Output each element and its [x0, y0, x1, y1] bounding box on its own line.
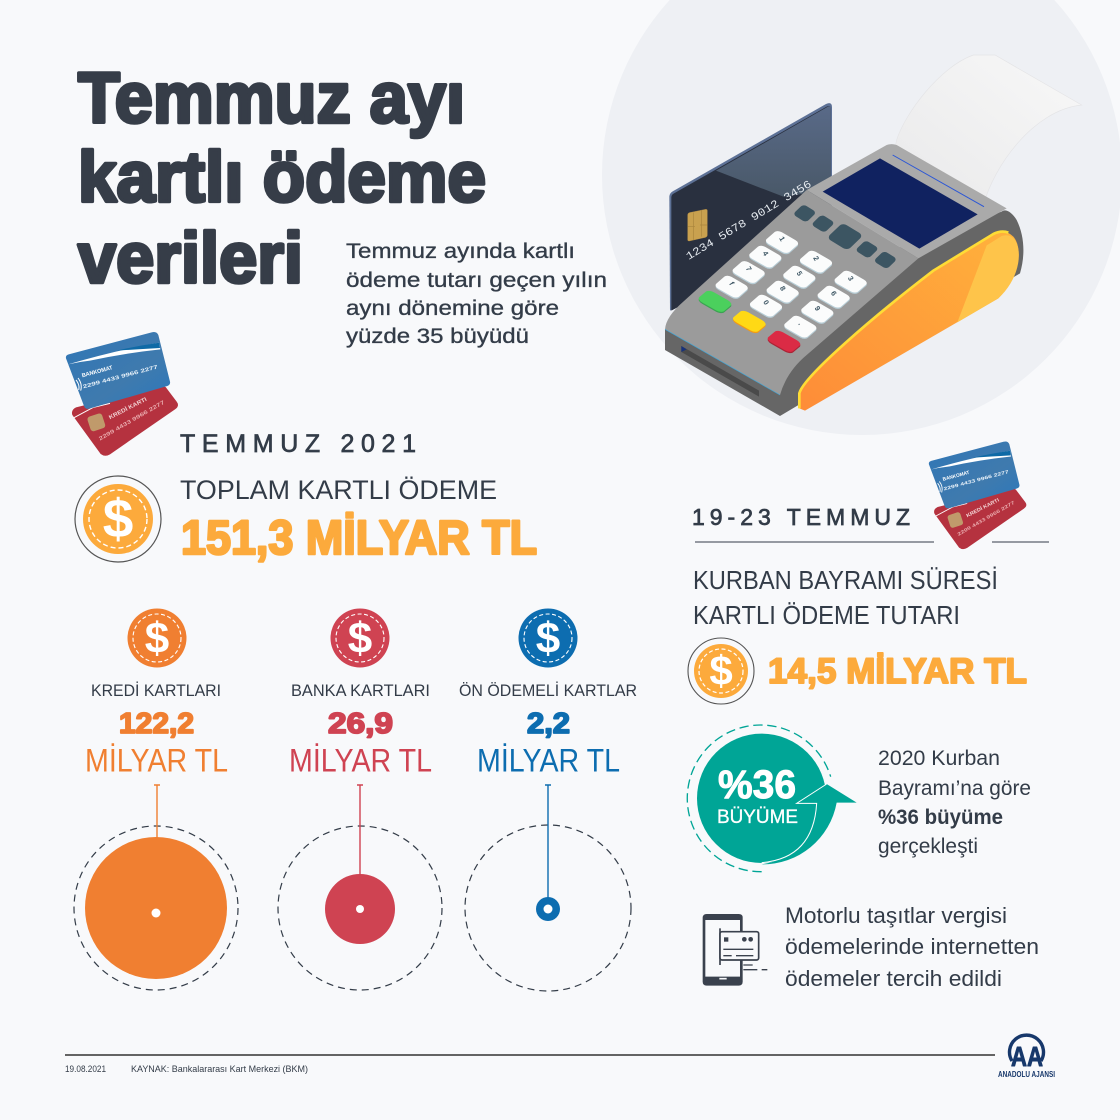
source: KAYNAK: Bankalararası Kart Merkezi (BKM)	[131, 1064, 308, 1075]
icon: coin: $	[103, 488, 133, 550]
icon: bank cards left: KREDİ KARTI	[108, 396, 148, 421]
growth description: 2020 Kurban	[878, 747, 1000, 770]
panel: bank cards	[278, 608, 442, 990]
keypad: 7	[744, 265, 754, 273]
keypad: 8	[778, 284, 788, 292]
date: 19.08.2021	[65, 1064, 106, 1075]
Kurban Bayramı heading	[693, 565, 998, 630]
icon: bank cards left: 2299 4433 9966 2277	[98, 400, 166, 442]
subtitle text: yüzde 35 büyüdü	[346, 324, 529, 348]
icon: bank cards right: 2299 4433 9966 2277	[957, 500, 1016, 537]
proportional circle	[465, 785, 631, 991]
logo: Anadolu Ajansı: AA	[1011, 1041, 1043, 1072]
keypad: 6	[829, 289, 839, 297]
icon: bank cards right: BANKOMAT	[942, 470, 970, 483]
terminal body	[665, 144, 1023, 416]
icon: coin small: $	[709, 647, 733, 694]
icon: blue coin: $	[536, 614, 560, 663]
subtitle text	[346, 239, 607, 348]
label: ÖN ÖDEMELİ KARTLAR	[459, 681, 637, 700]
total card payments: 151,3 MİLYAR TL	[181, 512, 537, 565]
subtitle text: ödeme tutarı geçen yılın	[346, 268, 607, 292]
keypad: 3	[846, 274, 856, 282]
icon: bank cards right: 2299 4433 9966 2277	[943, 469, 1010, 491]
logo: Anadolu Ajansı: ANADOLU AJANSI	[998, 1070, 1055, 1079]
icon: coin	[75, 476, 161, 562]
unit: MİLYAR TL	[85, 742, 228, 778]
credit card behind terminal	[669, 103, 832, 311]
online payment text: Motorlu taşıtlar vergisi	[785, 903, 1007, 928]
terminal screen	[823, 155, 984, 249]
label: KREDİ KARTLARI	[91, 681, 221, 700]
keypad: f	[727, 280, 737, 287]
icon: blue coin	[518, 608, 578, 668]
keypad: .	[796, 320, 805, 327]
keypad: 4	[761, 249, 771, 258]
growth description: gerçekleşti	[878, 835, 978, 858]
title	[78, 60, 486, 298]
icon: bank cards left	[66, 332, 178, 456]
unit: MİLYAR TL	[477, 742, 620, 778]
value: 2,2	[527, 708, 570, 740]
Kurban Bayramı heading: KURBAN BAYRAMI SÜRESİ	[693, 565, 998, 595]
receipt paper	[893, 55, 1082, 206]
icon: bank cards right: KREDİ KARTI	[965, 496, 1001, 519]
icon: red coin	[330, 608, 390, 668]
footer	[65, 1055, 995, 1075]
credit card behind terminal: 1234 5678 9012 3456	[685, 179, 814, 263]
online payment text: ödemelerinde internetten	[785, 934, 1039, 959]
icon: red coin: $	[348, 614, 372, 663]
orange grip	[799, 232, 1019, 411]
growth description: Bayramı’na göre	[878, 777, 1031, 800]
title: verileri	[78, 220, 303, 298]
online payment text	[785, 903, 1039, 991]
growth label: BÜYÜME	[717, 807, 798, 828]
unit: MİLYAR TL	[289, 742, 432, 778]
keypad	[714, 230, 869, 340]
total card payments: TOPLAM KARTLI ÖDEME	[180, 475, 497, 505]
growth circle and arrow	[687, 725, 857, 872]
proportional circle	[74, 785, 238, 990]
icon: bank cards left: 2299 4433 9966 2277	[82, 364, 159, 390]
function buttons	[793, 204, 897, 269]
value: 26,9	[328, 708, 393, 740]
panel: credit cards	[74, 608, 238, 990]
keypad: 2	[811, 254, 821, 262]
growth description	[878, 747, 1031, 858]
keypad: 1	[777, 235, 787, 243]
subtitle text: aynı dönemine göre	[346, 296, 559, 320]
online payment text: ödemeler tercih edildi	[785, 966, 1002, 991]
Kurban Bayramı heading: KARTLI ÖDEME TUTARI	[693, 600, 960, 630]
subtitle text: Temmuz ayında kartlı	[346, 239, 575, 263]
keypad: 0	[761, 298, 771, 306]
value: 122,2	[119, 708, 194, 740]
heading: 19-23 Temmuz: 19-23 TEMMUZ	[692, 504, 910, 530]
title: kartlı ödeme	[78, 138, 486, 218]
POS terminal illustration	[665, 55, 1082, 416]
growth value: %36	[718, 763, 796, 807]
heading: Temmuz 2021: TEMMUZ 2021	[180, 430, 416, 458]
icon: bank cards left: BANKOMAT	[81, 365, 114, 379]
keypad: 9	[813, 304, 822, 312]
Kurban Bayramı value: 14,5 MİLYAR TL	[768, 652, 1027, 691]
growth description: %36 büyüme	[878, 806, 1003, 829]
total card payments	[180, 475, 537, 565]
proportional circle	[278, 785, 442, 990]
icon: coin small	[688, 638, 754, 704]
panel: prepaid cards	[459, 608, 637, 991]
keypad: 5	[795, 269, 804, 277]
icon: phone with card	[703, 914, 767, 986]
logo: Anadolu Ajansı	[998, 1035, 1055, 1079]
title: Temmuz ayı	[78, 60, 465, 138]
icon: bank cards right	[929, 441, 1026, 549]
icon: orange coin: $	[145, 614, 169, 663]
label: BANKA KARTLARI	[291, 682, 430, 700]
green, yellow, red keys	[697, 289, 802, 355]
growth badge	[687, 725, 857, 872]
icon: orange coin	[128, 608, 186, 668]
